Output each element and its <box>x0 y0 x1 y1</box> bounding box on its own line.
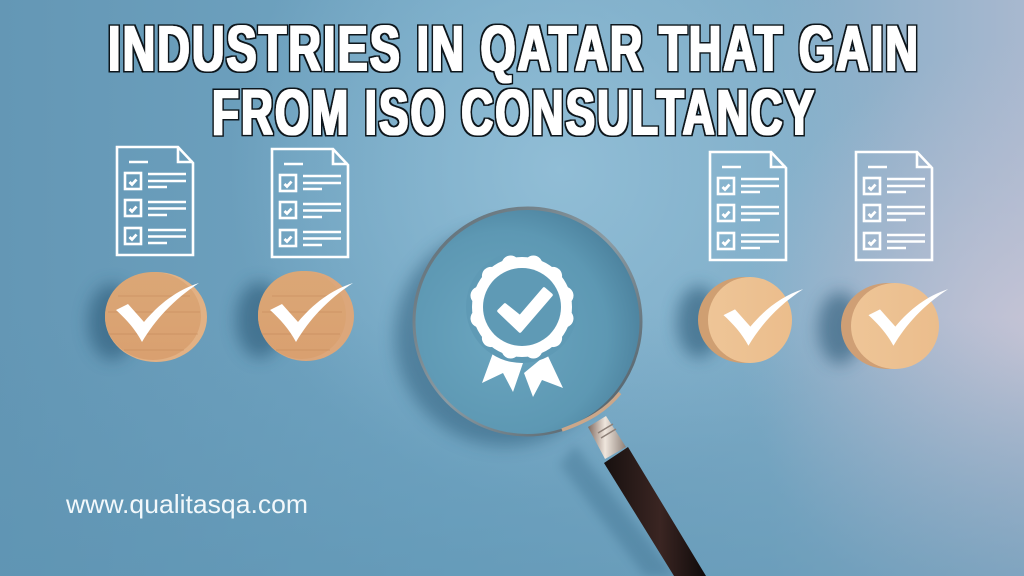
icon: checklist document 4 <box>856 152 932 260</box>
icon: certification badge <box>466 251 578 397</box>
black handle <box>604 447 706 576</box>
title <box>108 12 920 148</box>
lens and rim <box>412 206 642 436</box>
magnifying glass <box>395 206 706 576</box>
metal ferrule <box>588 416 626 459</box>
scalloped seal <box>470 256 574 358</box>
icon: checklist document 3 <box>710 152 786 260</box>
website url: www.qualitasqa.com <box>65 489 308 519</box>
ribbons <box>482 353 563 397</box>
wooden check disc 1 <box>88 272 207 362</box>
handle shadow <box>560 445 675 576</box>
icon: checklist document 1 <box>117 147 193 255</box>
lens shadow <box>395 226 615 446</box>
wooden check disc 4 <box>818 283 948 369</box>
wooden check disc 2 <box>236 271 354 361</box>
icon: checklist document 2 <box>272 149 348 257</box>
check mark <box>499 289 551 331</box>
wooden check disc 3 <box>677 277 803 363</box>
